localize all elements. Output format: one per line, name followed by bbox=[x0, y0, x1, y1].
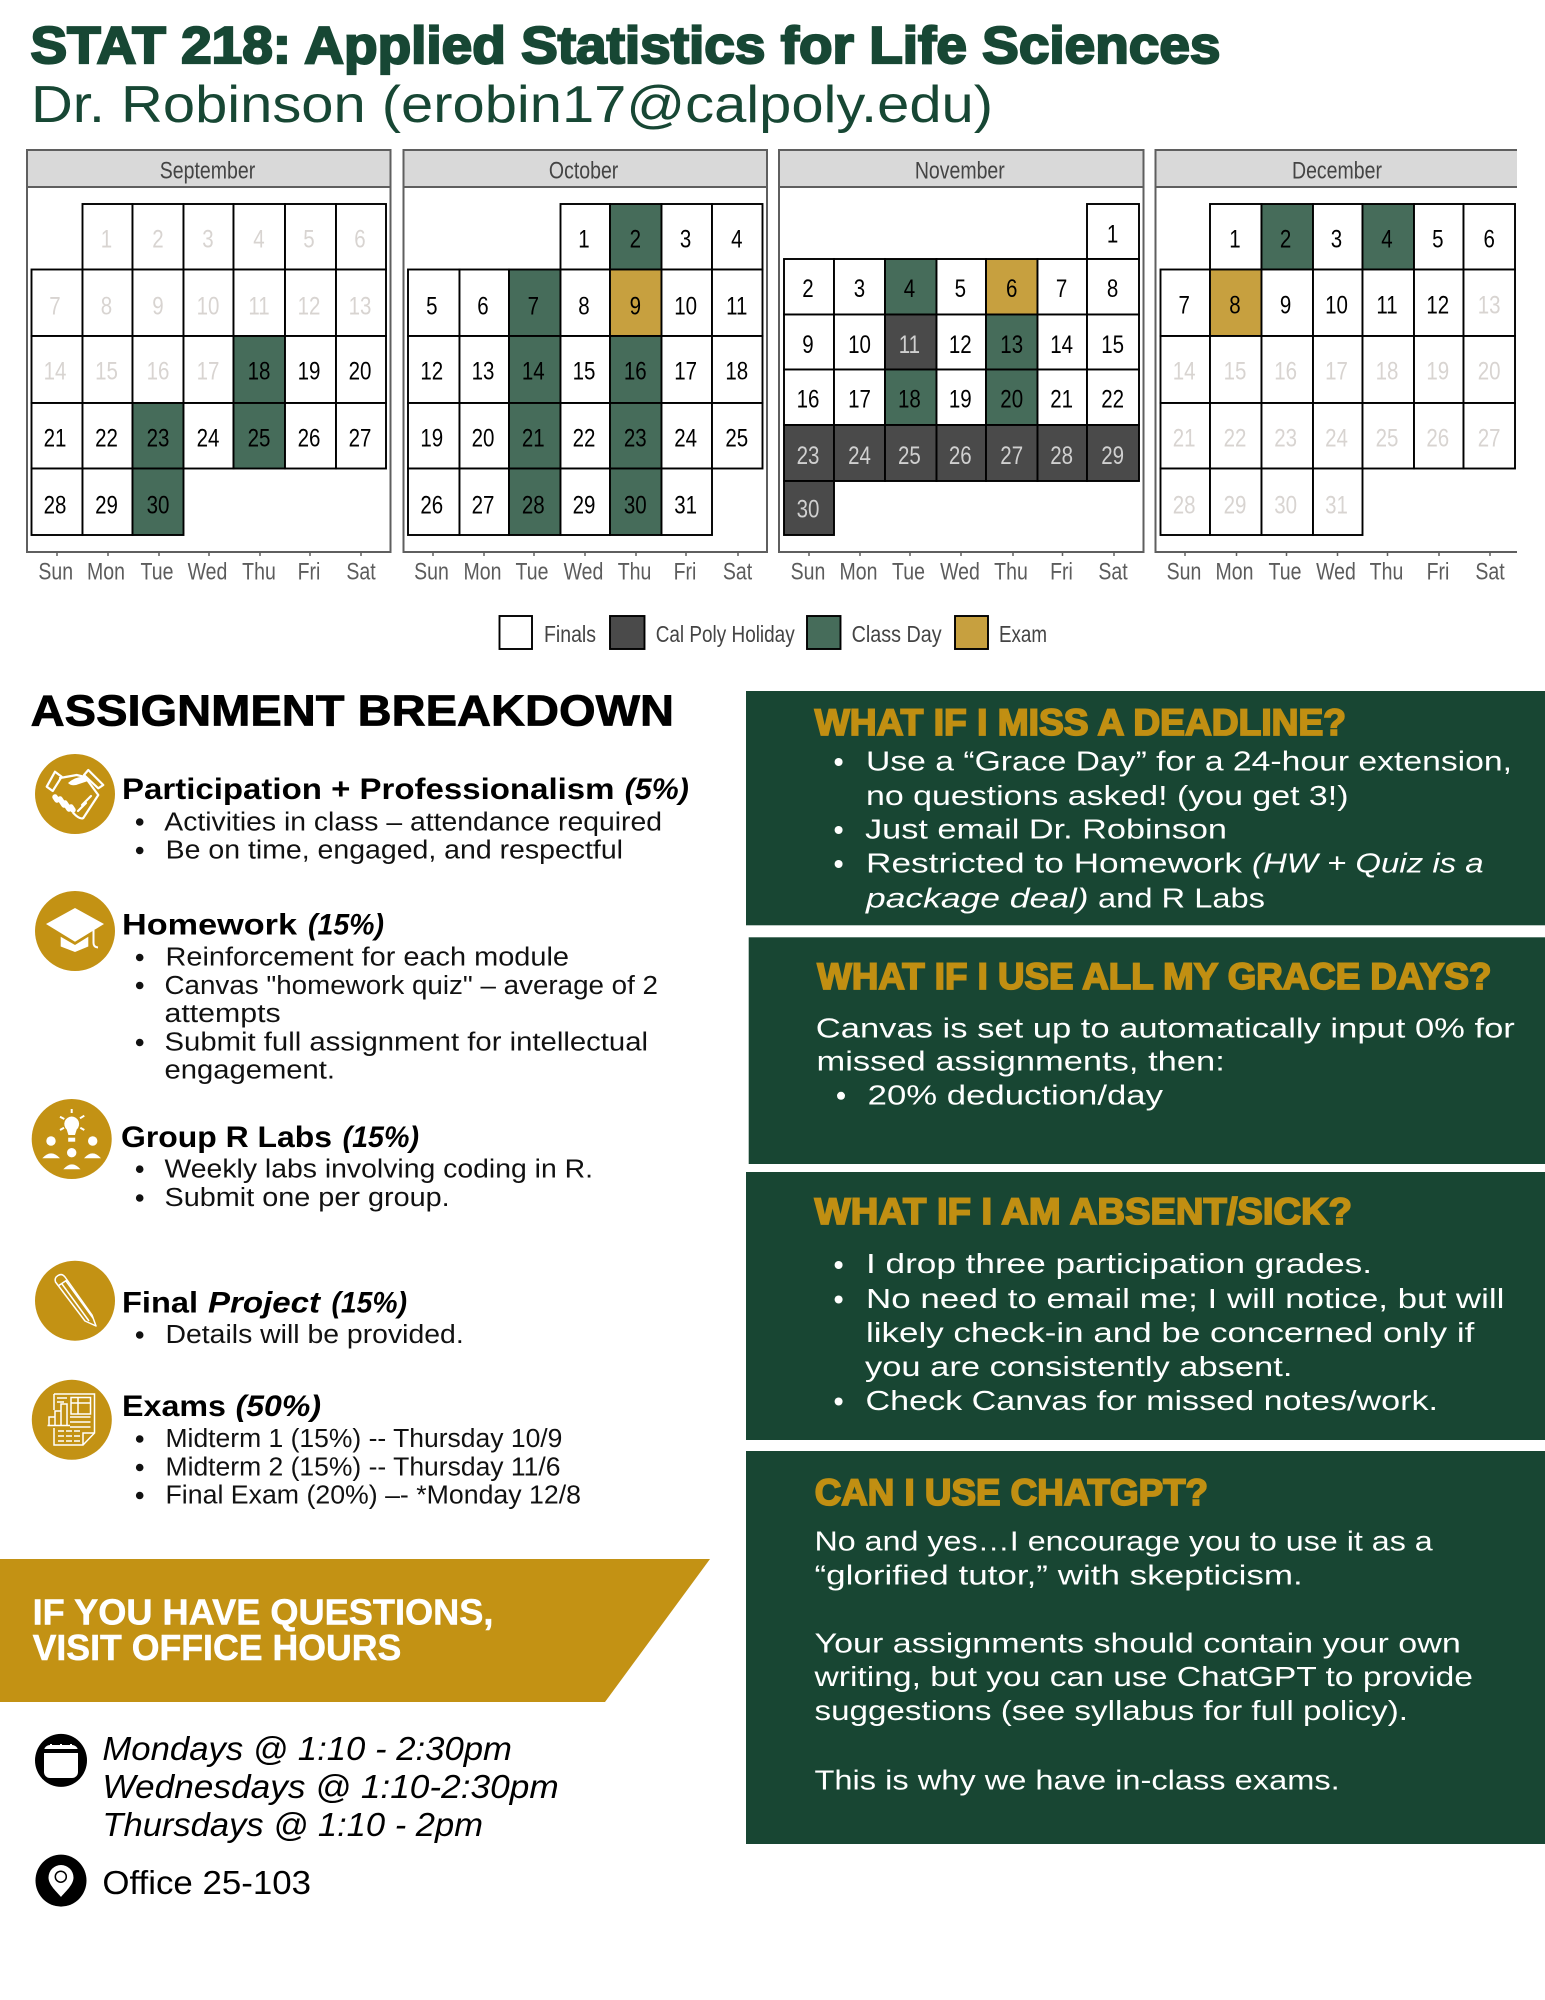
calendar panel: September: 24 bbox=[197, 423, 220, 452]
calendar panel: December: 15 bbox=[1224, 357, 1246, 385]
calendar panel: October: Wed bbox=[564, 558, 603, 585]
item: exams: (50%) bbox=[236, 1390, 321, 1423]
item: group R labs bbox=[32, 1099, 593, 1212]
calendar panel: September: 18 bbox=[248, 357, 270, 385]
calendar panel: October: 3 bbox=[680, 225, 691, 253]
title bbox=[30, 17, 1220, 134]
calendar panel: November: Sun bbox=[791, 558, 825, 585]
calendar panel: December: 4 bbox=[1381, 225, 1393, 253]
body text: No and yes…I encourage you to use it as a bbox=[814, 1526, 1433, 1557]
calendar panel: October: 24 bbox=[674, 423, 697, 452]
bullet list: Weekly labs involving coding in R. bbox=[164, 1155, 593, 1183]
calendar panel: November bbox=[779, 150, 1144, 585]
bullet list: no questions asked! (you get 3!) bbox=[866, 780, 1348, 811]
calendar panel: October: 17 bbox=[674, 357, 697, 385]
calendar panel: October: 7 bbox=[528, 291, 539, 320]
calendar panel: September: 3 bbox=[202, 225, 214, 253]
calendar legend bbox=[500, 616, 1047, 649]
calendar panel: November: November bbox=[915, 157, 1005, 184]
bullet list bbox=[136, 1155, 593, 1212]
calendar panel: September: 1 bbox=[101, 225, 112, 253]
calendar panel: September: 6 bbox=[354, 225, 366, 253]
calendar panel: September: 5 bbox=[303, 225, 315, 253]
body text bbox=[813, 1526, 1473, 1796]
calendar panel: September: 22 bbox=[95, 423, 118, 452]
calendar panel: October: 29 bbox=[573, 490, 595, 519]
calendar panel: September: 15 bbox=[95, 357, 118, 385]
calendar panel: September: 2 bbox=[152, 225, 164, 253]
calendar panel: October: 6 bbox=[477, 291, 489, 320]
title: STAT 218: Applied Statistics for Life Sciences bbox=[30, 17, 1220, 75]
calendar panel: November: 27 bbox=[1000, 441, 1023, 469]
calendar panel: December: 19 bbox=[1426, 357, 1449, 385]
calendar panel: October: Mon bbox=[464, 558, 501, 585]
calendar panel: September: 9 bbox=[152, 291, 164, 320]
calendar panel: October: 8 bbox=[578, 291, 590, 320]
office hours block bbox=[35, 1730, 559, 1907]
calendar panel: December: Sun bbox=[1167, 558, 1201, 585]
item: group R labs: (15%) bbox=[343, 1121, 419, 1154]
calendar panel: October: 14 bbox=[522, 357, 545, 385]
calendar panel: November: 3 bbox=[854, 274, 865, 302]
panel: what if I miss a deadline bbox=[746, 691, 1545, 925]
body text: missed assignments, then: bbox=[816, 1046, 1225, 1077]
item: final project: Final bbox=[122, 1287, 198, 1320]
icon: handshake bbox=[35, 754, 115, 834]
item: final project: (15%) bbox=[332, 1287, 407, 1320]
calendar panel: November: 13 bbox=[1000, 330, 1023, 359]
calendar panel: December: Wed bbox=[1316, 558, 1356, 585]
calendar panel: December: 14 bbox=[1173, 357, 1196, 385]
calendar panel: November: 17 bbox=[848, 385, 871, 413]
calendar panel: October: October bbox=[549, 157, 618, 184]
bullet list bbox=[136, 1425, 581, 1509]
icon: location pin bbox=[36, 1855, 86, 1907]
calendar panel: December: 31 bbox=[1325, 490, 1348, 519]
calendar panel: November: Thu bbox=[994, 558, 1028, 585]
calendar legend: Exam bbox=[999, 622, 1047, 648]
calendar panel: November: 28 bbox=[1050, 441, 1073, 469]
calendar panel: November: 30 bbox=[797, 494, 819, 523]
calendar panel: November: 22 bbox=[1101, 385, 1124, 413]
calendar panel: December: Sat bbox=[1475, 558, 1505, 585]
calendar panel: November: 6 bbox=[1006, 274, 1017, 302]
calendar panel: September: Fri bbox=[298, 558, 320, 585]
bullet list: Restricted to Homework bbox=[866, 848, 1243, 879]
calendar panel: November: Mon bbox=[840, 558, 877, 585]
calendar panel: September: 27 bbox=[349, 423, 371, 452]
calendar panel: November: 10 bbox=[848, 330, 871, 359]
bullet list: you are consistently absent. bbox=[865, 1351, 1292, 1382]
calendar panel: December: 1 bbox=[1229, 225, 1241, 253]
item: final project: Project bbox=[208, 1287, 322, 1320]
calendar panel: October: 9 bbox=[630, 291, 641, 320]
calendar panel: December: 17 bbox=[1325, 357, 1348, 385]
calendar panel: October: 2 bbox=[630, 225, 641, 253]
calendar panel: September: Wed bbox=[188, 558, 227, 585]
calendar panel: September: 19 bbox=[298, 357, 320, 385]
calendar panel: October: 4 bbox=[731, 225, 743, 253]
calendar panel: September: Tue bbox=[141, 558, 173, 585]
calendar panel: October bbox=[404, 150, 767, 585]
calendar panel: November: 25 bbox=[898, 441, 921, 469]
item: exams bbox=[32, 1380, 581, 1509]
calendar panel: November: 1 bbox=[1107, 220, 1118, 248]
calendar panel: November: 12 bbox=[949, 330, 972, 359]
calendar panel: September: 14 bbox=[44, 357, 67, 385]
bullet list bbox=[136, 944, 658, 1084]
calendar panel: December: December bbox=[1292, 157, 1382, 184]
body text: suggestions (see syllabus for full policy). bbox=[814, 1695, 1408, 1726]
bullet list: (HW + Quiz is a bbox=[1252, 848, 1484, 879]
body text: Canvas is set up to automatically input 0% for bbox=[816, 1012, 1515, 1043]
body text: Your assignments should contain your own bbox=[814, 1627, 1461, 1658]
bullet list: Activities in class – attendance required bbox=[164, 808, 662, 836]
calendar panel: December: Fri bbox=[1427, 558, 1449, 585]
bullet list bbox=[136, 808, 662, 865]
bullet list: package deal) bbox=[865, 883, 1089, 914]
bullet list: Use a “Grace Day” for a 24-hour extension, bbox=[866, 746, 1512, 777]
calendar panel: November: 5 bbox=[955, 274, 966, 302]
calendar panel: September: September bbox=[160, 157, 255, 184]
calendar panel: October: 12 bbox=[420, 357, 443, 385]
calendar panel: September bbox=[27, 150, 390, 585]
calendar panel: December: 8 bbox=[1229, 291, 1241, 319]
calendar panel: December: 24 bbox=[1325, 423, 1348, 452]
calendar panel: December: 21 bbox=[1173, 423, 1196, 452]
calendar panel: December: 28 bbox=[1173, 490, 1196, 519]
calendar panel: October: 28 bbox=[522, 490, 545, 519]
bullet list: Midterm 1 (15%) -- Thursday 10/9 bbox=[166, 1425, 562, 1453]
calendar panel: December: 27 bbox=[1478, 423, 1501, 452]
item: group R labs: Group R Labs bbox=[121, 1121, 332, 1154]
instructor subtitle: Dr. Robinson (erobin17@calpoly.edu) bbox=[31, 76, 993, 134]
icon: calendar bbox=[35, 1734, 87, 1787]
heading: assignment breakdown: ASSIGNMENT BREAKDOWN bbox=[31, 686, 674, 736]
bullet list: Check Canvas for missed notes/work. bbox=[866, 1385, 1438, 1416]
calendar panel: October: 10 bbox=[674, 291, 697, 320]
calendar panel: October: 26 bbox=[420, 490, 443, 519]
calendar panel: October: 18 bbox=[725, 357, 748, 385]
calendar panel: December: Tue bbox=[1269, 558, 1301, 585]
panel: can I use ChatGPT: CAN I USE CHATGPT? bbox=[815, 1472, 1208, 1513]
panel: what if I miss a deadline: WHAT IF I MISS A DEADLINE? bbox=[815, 702, 1346, 743]
calendar panel: November: 11 bbox=[899, 330, 920, 359]
calendar panel: October: Sun bbox=[414, 558, 449, 585]
office hours block: Thursdays @ 1:10 - 2pm bbox=[102, 1806, 483, 1843]
panel: can I use ChatGPT bbox=[746, 1451, 1545, 1844]
calendar panel: November: 2 bbox=[802, 274, 814, 302]
panel: what if I am absent or sick: WHAT IF I AM ABSENT/SICK? bbox=[815, 1191, 1352, 1232]
calendar panel: September: 12 bbox=[298, 291, 320, 320]
bullet list bbox=[835, 746, 1512, 914]
calendar panel: December: 25 bbox=[1376, 423, 1398, 452]
panel: what if I use all my grace days: WHAT IF I USE ALL MY GRACE DAYS? bbox=[817, 956, 1491, 997]
bullet list: Just email Dr. Robinson bbox=[865, 814, 1227, 845]
calendar panel: November: Fri bbox=[1050, 558, 1073, 585]
calendar panel: September: Thu bbox=[242, 558, 276, 585]
calendar panel: October: 31 bbox=[674, 490, 697, 519]
banner: office hours callout bbox=[0, 1559, 710, 1702]
item: homework: Homework bbox=[122, 908, 297, 942]
calendar panel: September: 25 bbox=[248, 423, 270, 452]
calendar panel: December: 11 bbox=[1376, 291, 1398, 319]
bullet list: likely check-in and be concerned only if bbox=[866, 1317, 1475, 1348]
calendar panel: November: 8 bbox=[1107, 274, 1118, 302]
calendar panel: December: Mon bbox=[1216, 558, 1253, 585]
bullet list: engagement. bbox=[164, 1056, 335, 1084]
calendar panel: November: 23 bbox=[797, 441, 819, 469]
calendar panel: October: Tue bbox=[516, 558, 548, 585]
calendar panel: November: 15 bbox=[1101, 330, 1124, 359]
calendar panel: October: 11 bbox=[726, 291, 747, 320]
calendar panel: December: 5 bbox=[1432, 225, 1444, 253]
calendar panel: December: 9 bbox=[1280, 291, 1291, 319]
banner: office hours callout: IF YOU HAVE QUESTIONS, bbox=[33, 1592, 493, 1632]
calendar panel: December: 26 bbox=[1426, 423, 1449, 452]
calendar panel: December: 10 bbox=[1325, 291, 1348, 319]
calendar panel: November: 21 bbox=[1050, 385, 1073, 413]
calendar panel: October: 27 bbox=[472, 490, 494, 519]
calendar panel: October: 22 bbox=[573, 423, 595, 452]
body text: This is why we have in-class exams. bbox=[814, 1764, 1340, 1796]
calendar panel: October: Fri bbox=[674, 558, 696, 585]
calendar panel: November: 14 bbox=[1050, 330, 1073, 359]
bullet list: Midterm 2 (15%) -- Thursday 11/6 bbox=[166, 1454, 560, 1482]
office hours block: Mondays @ 1:10 - 2:30pm bbox=[102, 1730, 512, 1767]
calendar panel: September: 17 bbox=[197, 357, 219, 385]
calendar panel: October: 23 bbox=[624, 423, 647, 452]
item: final project bbox=[35, 1261, 464, 1349]
item: participation + professionalism: (5%) bbox=[625, 773, 689, 806]
calendar legend: Finals bbox=[544, 622, 596, 648]
calendar panel: September: 23 bbox=[147, 423, 169, 452]
item: participation + professionalism: Participation + Professionalism bbox=[122, 773, 614, 806]
calendar panel: September: Sun bbox=[38, 558, 73, 585]
bullet list: I drop three participation grades. bbox=[866, 1248, 1372, 1279]
calendar panel: December: 30 bbox=[1274, 490, 1297, 519]
calendar panel: November: 18 bbox=[898, 385, 921, 413]
bullet list: Details will be provided. bbox=[166, 1321, 464, 1349]
item: participation + professionalism bbox=[35, 754, 689, 865]
bullet list: Reinforcement for each module bbox=[166, 944, 569, 972]
calendar panel: December: 2 bbox=[1280, 225, 1291, 253]
calendar panel: December bbox=[1156, 150, 1517, 585]
calendar panel: October: Thu bbox=[618, 558, 651, 585]
body text: writing, but you can use ChatGPT to provide bbox=[813, 1661, 1473, 1692]
calendar panel: September: 20 bbox=[349, 357, 371, 385]
calendar panel: November: 9 bbox=[802, 330, 814, 359]
panel: what if I use all my grace days bbox=[749, 937, 1545, 1164]
office hours block: Office 25-103 bbox=[102, 1864, 311, 1901]
calendar panel: October: 13 bbox=[472, 357, 494, 385]
calendar panel: December: 3 bbox=[1331, 225, 1342, 253]
calendar panel: December: 13 bbox=[1478, 291, 1501, 319]
calendar panel: September: Sat bbox=[346, 558, 376, 585]
calendar panel: September: 8 bbox=[101, 291, 112, 320]
calendar panel: December: 23 bbox=[1274, 423, 1297, 452]
calendar panel: September: 26 bbox=[298, 423, 320, 452]
bullet list bbox=[835, 1248, 1504, 1416]
calendar panel: October: 19 bbox=[420, 423, 443, 452]
calendar panel: October: 1 bbox=[578, 225, 590, 253]
calendar panel: November: 26 bbox=[949, 441, 972, 469]
calendar panel: September: 29 bbox=[95, 490, 118, 519]
calendar panel: September: 16 bbox=[147, 357, 169, 385]
calendar panel: October: 21 bbox=[522, 423, 545, 452]
calendar panel: December: 7 bbox=[1178, 291, 1190, 319]
calendar panel: November: 16 bbox=[797, 385, 819, 413]
calendar legend: Cal Poly Holiday bbox=[656, 622, 795, 648]
calendar panel: December: 6 bbox=[1483, 225, 1495, 253]
calendar panel: November: Wed bbox=[940, 558, 980, 585]
bullet list: Submit full assignment for intellectual bbox=[164, 1029, 648, 1057]
body text: 20% deduction/day bbox=[868, 1079, 1163, 1110]
bullet list: Be on time, engaged, and respectful bbox=[166, 837, 623, 865]
calendar panel: September: 13 bbox=[349, 291, 371, 320]
icon: pencil bbox=[35, 1261, 115, 1341]
office hours block: Wednesdays @ 1:10-2:30pm bbox=[102, 1768, 559, 1805]
icon: lightbulb and people bbox=[32, 1099, 112, 1179]
calendar panel: September: 21 bbox=[44, 423, 66, 452]
panel: what if I am absent or sick bbox=[746, 1172, 1545, 1440]
calendar panel: October: Sat bbox=[723, 558, 752, 585]
calendar panel: December: 16 bbox=[1274, 357, 1297, 385]
bullet list: attempts bbox=[164, 1000, 281, 1028]
item: homework bbox=[35, 891, 658, 1084]
calendar panel: October: 25 bbox=[725, 423, 748, 452]
body text: “glorified tutor,” with skepticism. bbox=[814, 1560, 1303, 1590]
calendar panel: December: Thu bbox=[1370, 558, 1403, 585]
bullet list: Final Exam (20%) –- *Monday 12/8 bbox=[166, 1481, 581, 1509]
banner: office hours callout: VISIT OFFICE HOURS bbox=[33, 1627, 401, 1668]
calendar panel: September: 7 bbox=[49, 291, 61, 320]
calendar panel: December: 12 bbox=[1426, 291, 1449, 319]
calendar panel: November: Tue bbox=[892, 558, 925, 585]
item: homework: (15%) bbox=[308, 908, 384, 942]
calendar panel: September: Mon bbox=[87, 558, 125, 585]
calendar panel: December: 20 bbox=[1478, 357, 1501, 385]
calendar panel: October: 30 bbox=[624, 490, 647, 519]
calendar panel: December: 18 bbox=[1376, 357, 1398, 385]
calendar panel: October: 20 bbox=[472, 423, 494, 452]
calendar panel: November: 7 bbox=[1056, 274, 1067, 302]
bullet list: Canvas "homework quiz" – average of 2 bbox=[164, 972, 658, 1000]
calendar panel: October: 15 bbox=[573, 357, 595, 385]
bullet list: and R Labs bbox=[1098, 883, 1265, 914]
icon: report document bbox=[32, 1380, 112, 1460]
calendar panel: September: 10 bbox=[197, 291, 219, 320]
calendar panel: December: 29 bbox=[1224, 490, 1246, 519]
calendar panel: November: 24 bbox=[848, 441, 871, 469]
bullet list: Submit one per group. bbox=[164, 1184, 450, 1212]
bullet list: No need to email me; I will notice, but will bbox=[866, 1283, 1504, 1314]
calendar panel: November: 19 bbox=[949, 385, 972, 413]
calendar panel: September: 28 bbox=[44, 490, 66, 519]
body text bbox=[816, 1012, 1515, 1110]
calendar panel: November: 29 bbox=[1101, 441, 1124, 469]
calendar panel: November: 20 bbox=[1000, 385, 1023, 413]
icon: graduation cap bbox=[35, 891, 115, 971]
calendar panel: October: 5 bbox=[426, 291, 438, 320]
calendar panel: October: 16 bbox=[624, 357, 647, 385]
item: exams: Exams bbox=[122, 1390, 226, 1423]
calendar panel: November: 4 bbox=[904, 274, 915, 302]
calendar panel: December: 22 bbox=[1224, 423, 1246, 452]
calendar panel: September: 30 bbox=[147, 490, 169, 519]
calendar legend: Class Day bbox=[852, 622, 942, 648]
calendar panel: November: Sat bbox=[1098, 558, 1128, 585]
calendar panel: September: 11 bbox=[248, 291, 270, 320]
calendar panel: September: 4 bbox=[253, 225, 265, 253]
